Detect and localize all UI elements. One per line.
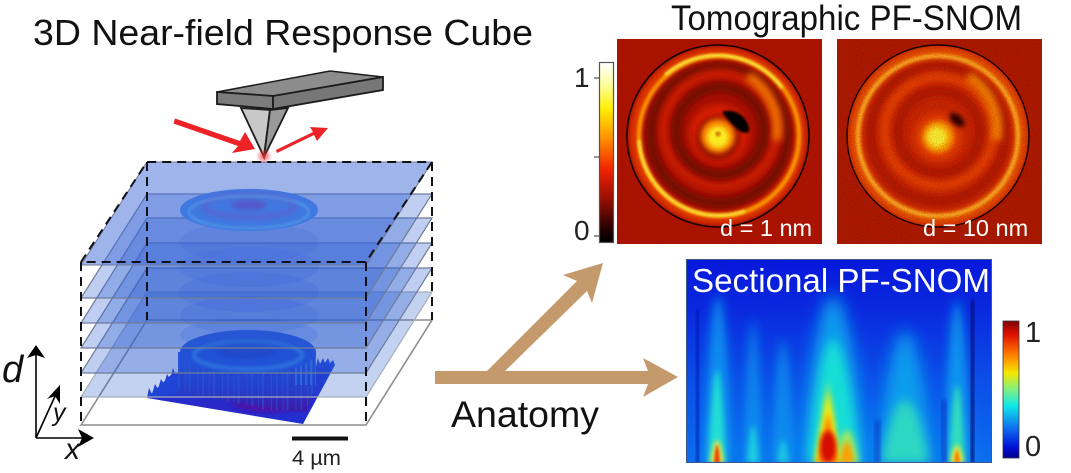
label: Sectional PF-SNOM: Sectional PF-SNOM bbox=[692, 262, 990, 299]
bottom plane outline bbox=[81, 320, 432, 425]
arrow: incident light bbox=[174, 118, 255, 153]
colour bar: sectional: 1 bbox=[1025, 317, 1041, 349]
colour bar: sectional bbox=[1003, 317, 1041, 463]
arrow: scattered light bbox=[276, 127, 328, 153]
heading: Tomographic PF-SNOM: Tomographic PF-SNOM bbox=[671, 0, 1022, 38]
label: d = 1 nm: d = 1 nm bbox=[720, 215, 812, 241]
axes: y bbox=[51, 399, 67, 427]
response cube stack bbox=[81, 162, 432, 425]
axes bbox=[2, 345, 94, 466]
top plane with disc bbox=[81, 162, 432, 265]
dashed cube edges bbox=[81, 162, 432, 425]
axes: x bbox=[63, 433, 81, 466]
colour bar: sectional: 0 bbox=[1025, 431, 1041, 463]
heatmap: d = 1 nm bbox=[617, 39, 822, 244]
scale bar 4 µm bbox=[292, 436, 348, 470]
axes: d bbox=[2, 349, 25, 391]
colour bar: tomographic bbox=[574, 62, 614, 246]
heatmap: sectional PF-SNOM bbox=[686, 259, 992, 463]
heatmap: d = 10 nm bbox=[837, 39, 1042, 244]
colour bar: tomographic: 1 bbox=[574, 62, 590, 93]
sample surface topography bbox=[147, 330, 335, 424]
scale bar 4 µm: 4 µm bbox=[292, 447, 341, 470]
title: 3D Near-field Response Cube: 3D Near-field Response Cube bbox=[33, 12, 533, 53]
stacked translucent planes bbox=[81, 194, 432, 397]
label: Anatomy: Anatomy bbox=[451, 393, 599, 435]
arrow: anatomy branches bbox=[435, 263, 678, 397]
icon: AFM cantilever and tip bbox=[217, 71, 383, 157]
near-field glow at tip apex bbox=[256, 148, 272, 164]
colour bar: tomographic: 0 bbox=[574, 215, 590, 246]
label: d = 10 nm: d = 10 nm bbox=[923, 215, 1028, 241]
